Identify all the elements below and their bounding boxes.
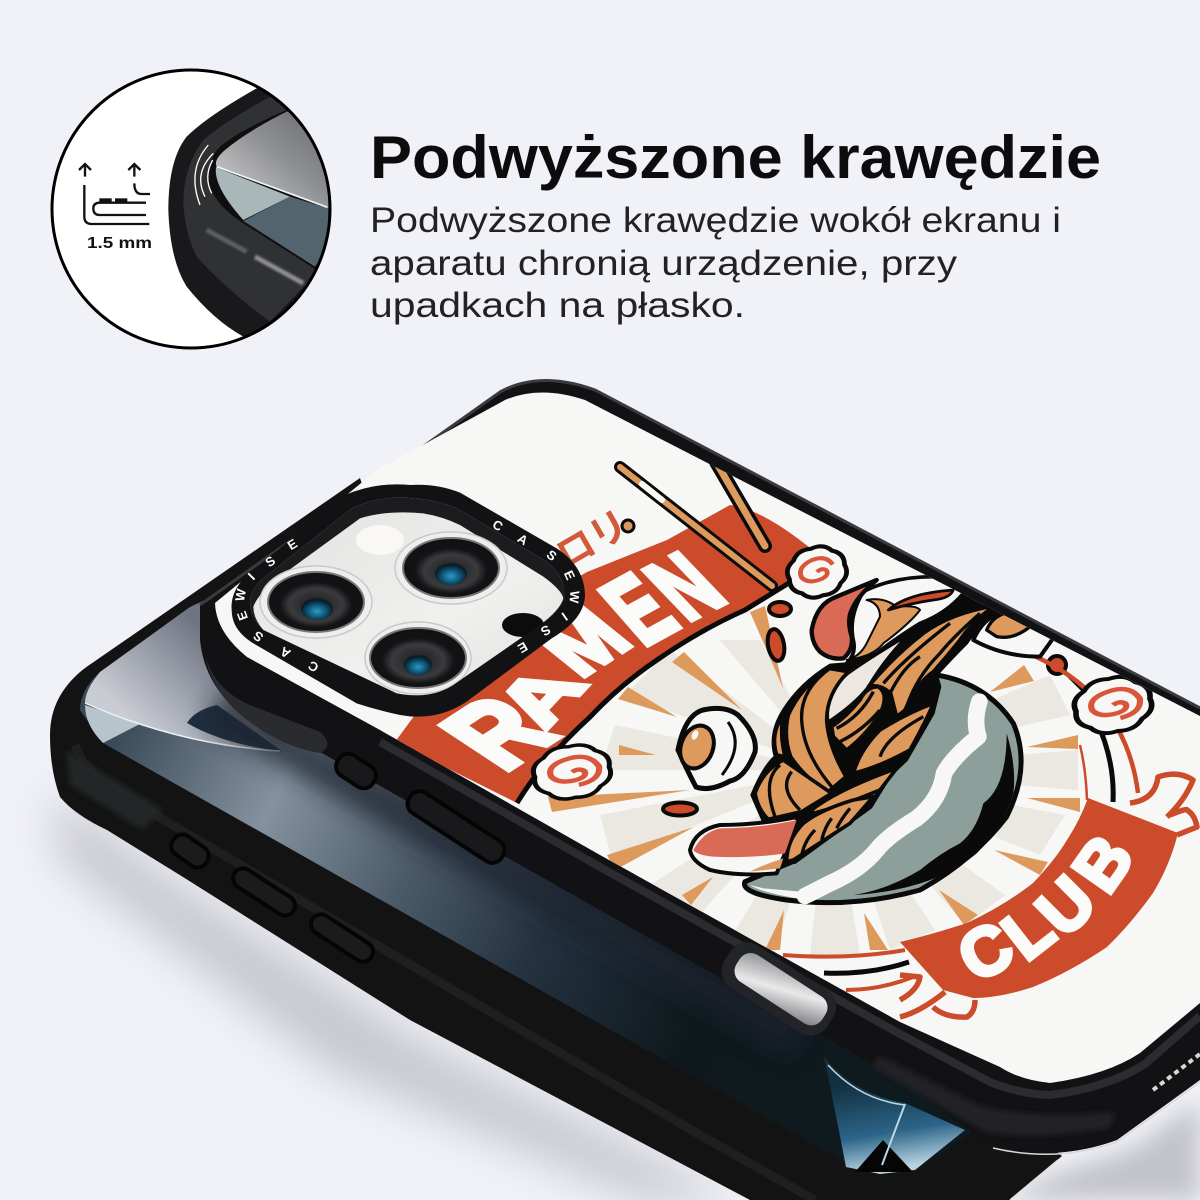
orange sun rays bbox=[548, 606, 1080, 950]
noodle strands bbox=[755, 606, 995, 862]
naruto fish cakes bbox=[531, 541, 1155, 803]
upper right egg bbox=[973, 610, 1057, 657]
CASEWISE ring lettering: C bbox=[490, 517, 506, 535]
RAMEN lettering bbox=[436, 550, 730, 774]
lower meat slice bbox=[690, 817, 798, 874]
camera island bbox=[231, 484, 585, 717]
pale wallpaper corner bbox=[85, 705, 140, 743]
CASEWISE ring lettering: I bbox=[245, 570, 258, 583]
CASEWISE ring lettering: W bbox=[566, 590, 583, 604]
shadow under phones bbox=[50, 790, 740, 1200]
bumper corner panels bbox=[66, 750, 163, 830]
noodle silhouette bbox=[752, 593, 1003, 863]
lower phone side buttons bbox=[167, 831, 377, 965]
CASEWISE ring lettering: I bbox=[559, 609, 570, 624]
CASEWISE ring lettering: A bbox=[277, 643, 293, 661]
CASEWISE ring lettering: C bbox=[305, 657, 321, 675]
RAMEN lettering: A bbox=[477, 655, 606, 738]
CASEWISE ring lettering: S bbox=[262, 553, 278, 570]
black ring bbox=[231, 484, 585, 717]
bowl and noodles art bbox=[690, 577, 1057, 903]
body text: upadkach na płasko. bbox=[370, 286, 745, 325]
egg bbox=[674, 708, 755, 789]
CASEWISE ring lettering: E bbox=[515, 639, 530, 656]
beige halftone wedges bbox=[600, 640, 1078, 955]
phone: top phone case back bbox=[200, 380, 1200, 1154]
red garnish dots bbox=[663, 602, 1066, 816]
upper grey wallpaper bbox=[85, 600, 280, 750]
lens 3 bbox=[365, 622, 471, 694]
CLUB ribbon tails bbox=[900, 774, 1197, 1017]
dot above banner bbox=[622, 520, 634, 532]
case body bbox=[200, 380, 1200, 1153]
body text: Podwyższone krawędzie wokół ekranu i bbox=[370, 201, 1061, 240]
CASEWISE ring lettering: E bbox=[285, 536, 300, 553]
close-up photo of raised bumper corner bbox=[168, 88, 340, 337]
chopsticks bbox=[620, 462, 772, 586]
noodle contour lines bbox=[769, 613, 980, 855]
RAMEN lettering: R bbox=[416, 678, 581, 787]
RAMEN banner bbox=[395, 505, 838, 803]
camera glass bbox=[250, 498, 565, 695]
CLUB lettering: B bbox=[1058, 822, 1148, 906]
flash bbox=[356, 525, 404, 555]
RAMEN lettering: N bbox=[624, 535, 744, 637]
heading: Podwyższone krawędzie bbox=[370, 124, 1101, 191]
phone: lower phone seen from screen side bbox=[50, 478, 1062, 1200]
CASEWISE ring lettering: A bbox=[515, 531, 531, 549]
dark curve shape under camera bbox=[187, 705, 282, 751]
lower phone rim at bottom right bbox=[1010, 1160, 1058, 1200]
detail circle: raised edge close-up bbox=[52, 70, 340, 348]
CLUB lettering: L bbox=[988, 889, 1068, 975]
kana lettering: ロリ bbox=[550, 503, 636, 578]
RAMEN lettering: M bbox=[517, 593, 650, 691]
CASEWISE ring lettering: W bbox=[232, 587, 249, 602]
CASEWISE ring lettering: S bbox=[250, 628, 266, 645]
CLUB lettering bbox=[960, 837, 1131, 978]
charging port bbox=[714, 935, 844, 1043]
label: 1.5 mm: 1.5 mm bbox=[87, 235, 152, 252]
top phone side buttons bbox=[332, 749, 509, 867]
body text bbox=[370, 201, 1061, 325]
CASEWISE ring lettering: E bbox=[234, 609, 251, 622]
shade cast by top phone bbox=[215, 705, 800, 1040]
printed artwork: ramen club on case back bbox=[180, 370, 1200, 1100]
body text: aparatu chronią urządzenie, przy bbox=[370, 244, 958, 283]
outer ring lines bbox=[783, 650, 1138, 990]
white back panel bbox=[180, 370, 1200, 1100]
icon: raised edge diagram bbox=[79, 164, 150, 224]
CLUB banner bbox=[900, 798, 1178, 998]
lens 1 bbox=[260, 566, 372, 638]
bowl bbox=[745, 675, 1021, 903]
grille bbox=[1153, 1054, 1200, 1090]
CASEWISE ring lettering: S bbox=[544, 547, 560, 564]
CLUB lettering: C bbox=[946, 907, 1026, 997]
thin white outer edge bbox=[993, 1082, 1200, 1154]
CASEWISE ring lettering bbox=[232, 517, 583, 675]
gap between strands bbox=[829, 642, 900, 719]
lower phone screen bbox=[80, 607, 975, 1173]
camera bump shoulder bbox=[205, 655, 328, 753]
RAMEN lettering: E bbox=[581, 555, 697, 664]
lens 2 bbox=[395, 532, 507, 604]
frame highlight along lower edge bbox=[380, 742, 1200, 1095]
CASEWISE ring lettering: E bbox=[561, 568, 578, 583]
upper meat slice bbox=[812, 577, 963, 663]
shadow of top phone bbox=[1000, 1100, 1200, 1200]
microphone hole bbox=[502, 613, 544, 637]
CLUB lettering: U bbox=[1022, 862, 1110, 951]
CASEWISE ring lettering: S bbox=[538, 622, 553, 639]
bottom corner panel bbox=[872, 1056, 1114, 1135]
blue wallpaper flare bbox=[824, 1057, 965, 1174]
